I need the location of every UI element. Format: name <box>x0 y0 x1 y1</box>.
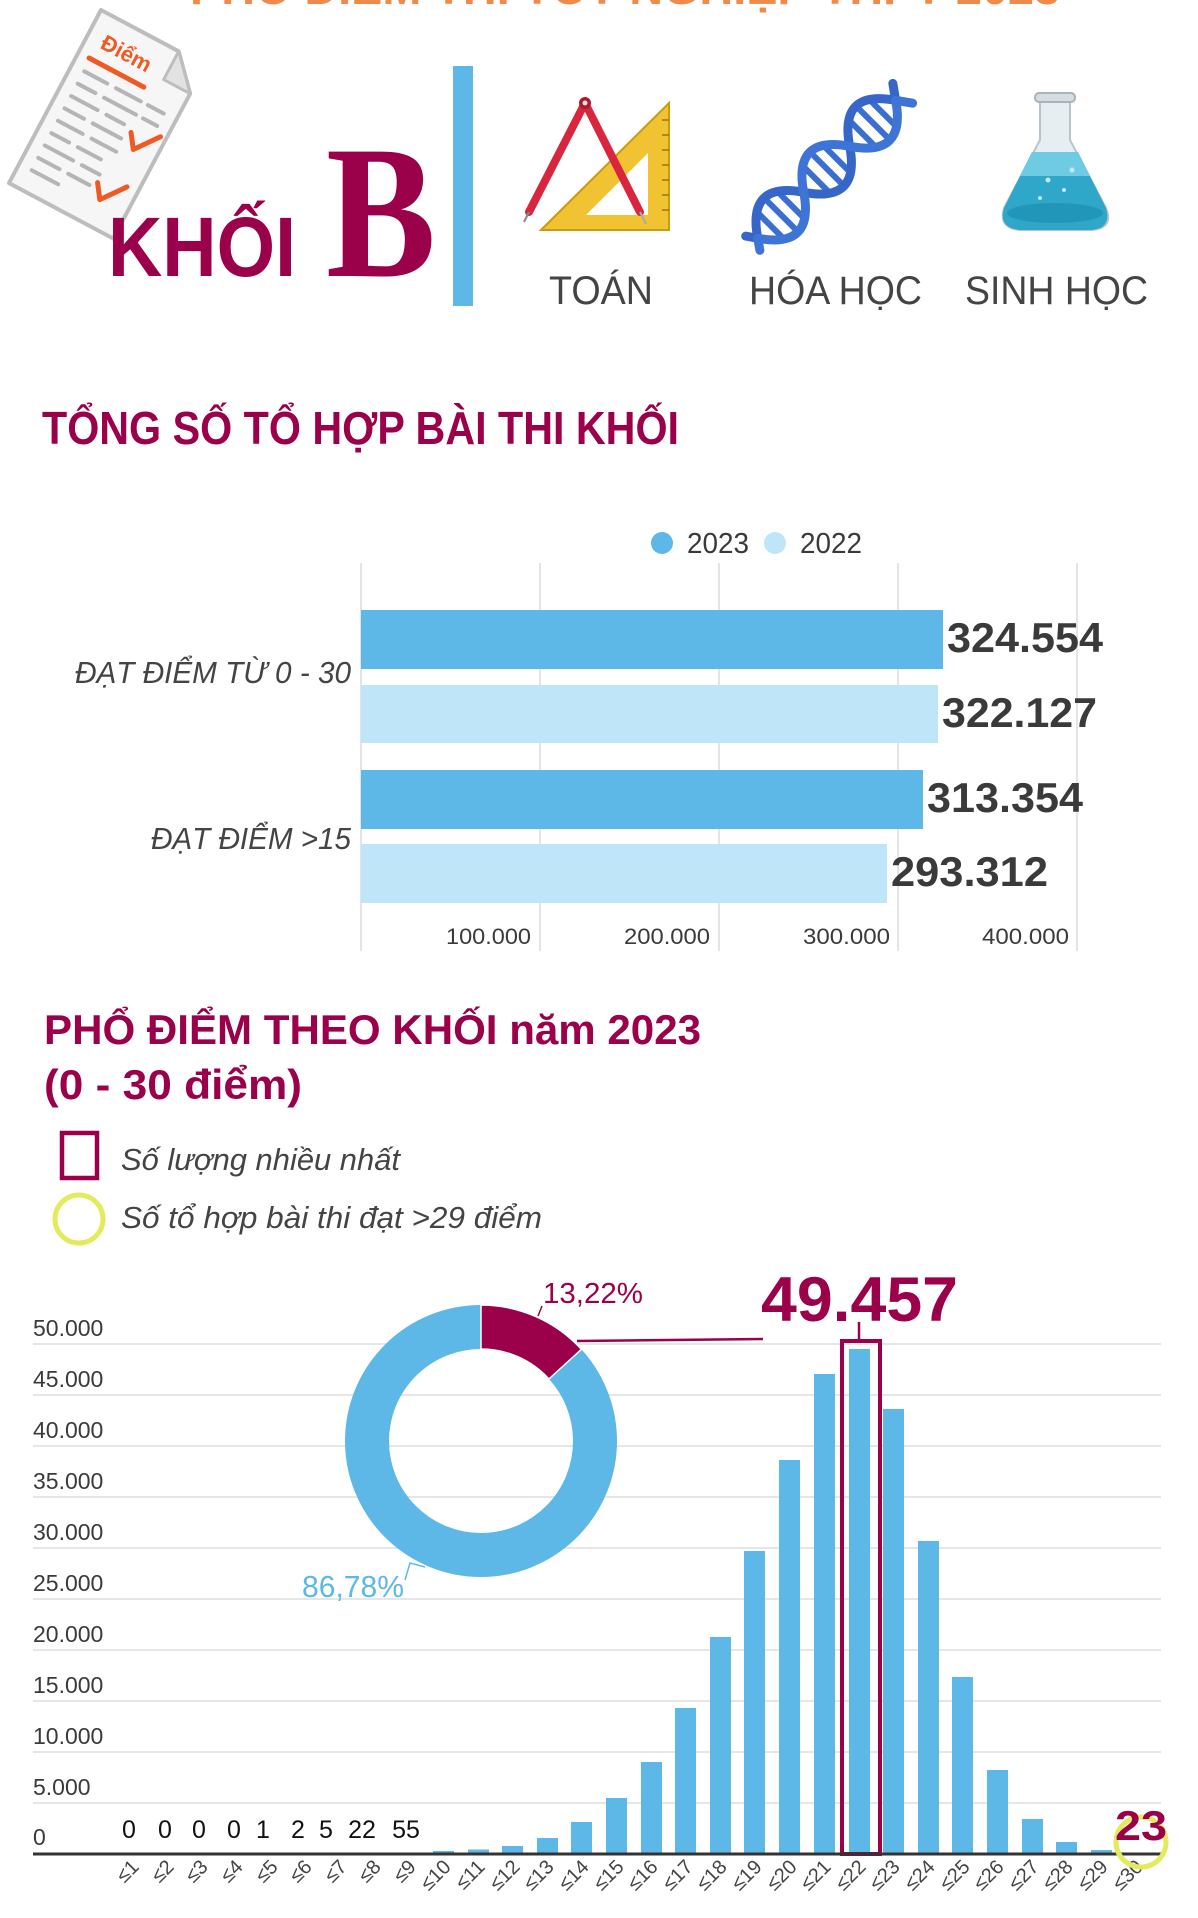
x axis labels: ≤15 <box>589 1856 629 1895</box>
bar chart legend <box>651 528 862 560</box>
heading: KHỐI B: KHỐI <box>108 200 296 294</box>
x axis labels: ≤14 <box>554 1856 594 1895</box>
column chart: score distribution <box>33 1315 1161 1895</box>
y axis labels: 30.000 <box>33 1519 103 1545</box>
small value labels: 5 <box>319 1816 333 1844</box>
baseline <box>33 1852 1161 1856</box>
section title: Tổng số tổ hợp bài thi khối: TỔNG SỐ TỔ HỢP BÀI THI KHỐI <box>42 402 679 454</box>
y axis labels: 35.000 <box>33 1468 103 1494</box>
x axis labels: ≤11 <box>452 1856 490 1894</box>
x axis labels: ≤18 <box>692 1856 732 1895</box>
x axis labels: ≤10 <box>416 1856 456 1895</box>
subject labels: SINH HỌC <box>965 269 1148 313</box>
icon: DNA helix (Hóa học) <box>736 76 920 260</box>
x axis labels: ≤26 <box>969 1856 1009 1895</box>
callout: 49.457 peak value: 49.457 <box>761 1265 958 1335</box>
y axis labels: 40.000 <box>33 1417 103 1443</box>
small value labels: 0 <box>192 1816 206 1844</box>
small value labels: 1 <box>256 1816 270 1844</box>
heading: KHỐI B: B <box>326 108 436 318</box>
x axis labels: ≤13 <box>519 1856 559 1895</box>
horizontal bar chart <box>75 563 1104 951</box>
value labels: 324.554 <box>947 614 1104 661</box>
x axis labels: ≤1 <box>112 1856 144 1887</box>
y axis labels: 0 <box>33 1824 46 1850</box>
value labels: 313.354 <box>927 774 1084 821</box>
section title: Phổ điểm theo khối năm 2023 <box>44 1004 701 1108</box>
small value labels: 22 <box>348 1816 376 1844</box>
y axis labels: 10.000 <box>33 1723 103 1749</box>
x axis labels: ≤16 <box>623 1856 663 1895</box>
axis labels <box>446 924 1069 949</box>
icon: flask (Sinh học) <box>1003 93 1108 230</box>
small value labels: 0 <box>122 1816 136 1844</box>
section title: Phổ điểm theo khối năm 2023: PHỔ ĐIỂM THEO KHỐI năm 2023 <box>44 1004 701 1053</box>
category labels <box>75 655 352 856</box>
legend: highest count / >29 points: Số tổ hợp bài thi đạt >29 điểm <box>121 1200 542 1235</box>
y axis labels: 20.000 <box>33 1621 103 1647</box>
x axis labels: ≤17 <box>658 1856 698 1895</box>
bars <box>433 1349 1112 1854</box>
x axis labels: ≤22 <box>831 1856 871 1895</box>
legend: highest count / >29 points: Số lượng nhiều nhất <box>121 1142 401 1177</box>
category labels: ĐẠT ĐIỂM >15 <box>151 821 352 856</box>
x axis labels: ≤2 <box>147 1856 179 1887</box>
section title: Phổ điểm theo khối năm 2023: (0 - 30 điểm) <box>44 1061 302 1108</box>
icon: score paper: Điểm <box>97 30 156 77</box>
heading: KHỐI B <box>108 108 436 318</box>
small value labels: 55 <box>392 1816 420 1844</box>
callout: 23 combos above 29 points <box>1115 1802 1167 1867</box>
subject labels: TOÁN <box>549 268 653 313</box>
x axis labels: ≤27 <box>1004 1856 1044 1895</box>
callout: 23 combos above 29 points: 23 <box>1115 1802 1167 1849</box>
x axis labels: ≤25 <box>935 1856 975 1895</box>
donut chart: share of peak: 86,78% <box>302 1569 404 1604</box>
y axis labels: 45.000 <box>33 1366 103 1392</box>
x axis labels: ≤21 <box>796 1856 836 1895</box>
value labels: 322.127 <box>942 689 1097 736</box>
y axis labels: 25.000 <box>33 1570 103 1596</box>
bar chart legend: 2022 <box>800 528 862 560</box>
x axis labels: ≤8 <box>354 1856 386 1887</box>
axis labels: 300.000 <box>803 924 890 949</box>
small value labels: 0 <box>158 1816 172 1844</box>
y axis labels: 5.000 <box>33 1774 91 1800</box>
x axis labels: ≤28 <box>1038 1856 1078 1895</box>
legend: highest count / >29 points <box>55 1133 542 1243</box>
x axis labels: ≤6 <box>285 1856 317 1887</box>
x axis labels: ≤3 <box>181 1856 213 1887</box>
value labels: 293.312 <box>891 848 1048 895</box>
small value labels <box>122 1816 420 1844</box>
donut chart: share of peak: 13,22% <box>543 1278 643 1310</box>
x axis labels: ≤5 <box>251 1856 283 1887</box>
icon: compass and set square (Toán) <box>524 97 669 230</box>
x axis labels <box>112 1856 1148 1895</box>
bars <box>361 610 943 669</box>
x axis labels: ≤7 <box>320 1856 352 1887</box>
x axis labels: ≤24 <box>900 1856 940 1895</box>
axis labels: 400.000 <box>982 924 1069 949</box>
bar chart legend: 2023 <box>687 528 749 560</box>
icon: score paper <box>9 10 205 238</box>
axis labels: 100.000 <box>446 924 531 949</box>
x axis labels: ≤4 <box>216 1856 248 1887</box>
x axis labels: ≤23 <box>865 1856 905 1895</box>
x axis labels: ≤12 <box>485 1856 525 1895</box>
y axis labels <box>33 1315 103 1850</box>
x axis labels: ≤29 <box>1073 1856 1113 1895</box>
y axis labels: 15.000 <box>33 1672 103 1698</box>
x axis labels: ≤9 <box>389 1856 421 1887</box>
value labels <box>891 614 1104 895</box>
blue vertical divider <box>453 66 473 306</box>
category labels: ĐẠT ĐIỂM TỪ 0 - 30 <box>75 655 351 690</box>
axis labels: 200.000 <box>624 924 710 949</box>
highlight box around ≤22 <box>842 1341 880 1854</box>
x axis labels: ≤20 <box>762 1856 802 1895</box>
small value labels: 0 <box>227 1816 241 1844</box>
small value labels: 2 <box>291 1816 305 1844</box>
subject labels <box>549 268 1148 313</box>
donut chart: share of peak <box>302 1278 763 1604</box>
subject labels: HÓA HỌC <box>749 268 922 313</box>
x axis labels: ≤19 <box>727 1856 767 1895</box>
x axis labels: ≤30 <box>1108 1856 1148 1895</box>
y axis labels: 50.000 <box>33 1315 103 1341</box>
